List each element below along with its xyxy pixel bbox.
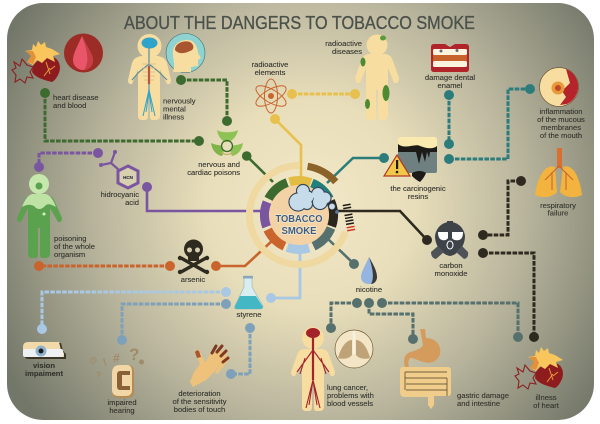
connector: orange arsenic xyxy=(34,240,273,271)
icon: gas mask xyxy=(431,221,468,259)
center label: TOBACCO xyxy=(276,213,322,225)
label: carbon monoxide: monoxide xyxy=(435,269,467,278)
label: nervously mental illness: nervously xyxy=(163,96,196,106)
label: inflammation of the mucous membranes: inflammation xyxy=(539,107,583,116)
icon: hand xyxy=(190,346,228,387)
connector: muted blue styrene xyxy=(117,299,255,379)
icon: ear with symbols: @ xyxy=(89,356,97,365)
label: respiratory failure: failure xyxy=(548,208,568,218)
connector: teal resins xyxy=(327,84,535,183)
icon: ear with symbols: ! xyxy=(101,357,109,369)
label: lung cancer: lung cancer, xyxy=(327,383,368,392)
central tobacco smoke diagram xyxy=(236,152,362,278)
label: deterioration of sensitivity: deterioration xyxy=(178,389,221,398)
label: poisoning of the whole organism: of the whole xyxy=(54,242,95,251)
label: poisoning of the whole organism: organism xyxy=(54,250,85,259)
icon: circulatory figure xyxy=(291,327,335,411)
label: deterioration of sensitivity: of the sensitivity xyxy=(172,397,227,406)
icon: eye xyxy=(23,342,66,359)
icon: warning triangle xyxy=(384,155,426,182)
icon: heart with burst xyxy=(12,41,60,83)
label: inflammation of the mucous membranes: of the mouth xyxy=(540,131,582,140)
icon: heart with burst lower xyxy=(515,347,563,389)
label: arsenic: arsenic xyxy=(181,275,205,284)
label: inflammation of the mucous membranes: membranes xyxy=(541,123,581,132)
icon: lungs xyxy=(535,148,582,197)
label: hidrocyanic acid: acid xyxy=(125,198,139,207)
connector: green poisons xyxy=(40,75,273,182)
icon: nervous system figure xyxy=(128,34,171,120)
label: illness of heart: illness xyxy=(535,393,557,402)
label: radioactive elements: radioactive xyxy=(252,60,288,69)
label: poisoning of the whole organism: poisoning xyxy=(54,234,87,243)
label: heart disease: heart disease xyxy=(53,93,99,102)
label: the carcinogenic resins: resins xyxy=(408,192,428,201)
label: nervous and cardiac poisons: nervous and xyxy=(198,160,240,169)
icon: stomach and intestine xyxy=(400,329,451,409)
label: inflammation of the mucous membranes: of the mucous xyxy=(537,115,585,124)
label: radioactive diseases: radioactive xyxy=(325,39,362,48)
label: carbon monoxide: carbon xyxy=(439,261,463,270)
label: nicotine: nicotine xyxy=(356,285,382,294)
smoke cloud xyxy=(289,184,339,214)
label: illness of heart: of heart xyxy=(533,401,560,410)
connector: yellow radioactive xyxy=(270,89,360,178)
label: respiratory failure: respiratory xyxy=(540,201,576,210)
label: heart disease: and blood xyxy=(53,101,86,110)
icon: lungs circle xyxy=(335,330,373,368)
icon: resin box xyxy=(398,137,437,173)
label: radioactive elements: elements xyxy=(255,68,286,77)
icon: HCN molecule xyxy=(99,150,138,188)
icon: ear with symbols: ? xyxy=(96,370,102,380)
label: damage dental enamel: damage dental xyxy=(425,73,475,82)
cigarette stripes xyxy=(343,204,355,231)
label: gastric damage and intestine: gastric damage xyxy=(457,391,509,400)
label: impaired hearing: impaired xyxy=(107,398,137,407)
label: styrene: styrene xyxy=(237,310,261,319)
label: vision impaiment: impaiment xyxy=(25,369,63,378)
icon: ear with symbols xyxy=(89,345,144,398)
label: lung cancer: problems with xyxy=(327,391,374,400)
icon: ear with symbols: ? xyxy=(129,345,139,364)
icon: poisoned green figure xyxy=(17,174,62,258)
label: nervous and cardiac poisons: cardiac poisons xyxy=(187,168,240,177)
label: nervously mental illness: mental xyxy=(163,104,186,114)
label: deterioration of sensitivity: bodies of touch xyxy=(174,405,225,414)
center label: SMOKE xyxy=(282,225,316,237)
center label xyxy=(276,213,322,237)
icon: blood drop circle xyxy=(64,34,103,72)
label: the carcinogenic resins: the carcinogenic xyxy=(390,184,446,193)
label: vision impaiment: vision xyxy=(33,361,55,370)
label: damage dental enamel: enamel xyxy=(438,81,463,90)
icon: inflamed mouth circle xyxy=(540,68,578,106)
icon: ear with symbols: # xyxy=(113,351,120,365)
label: radioactive diseases: diseases xyxy=(332,47,362,56)
label: impaired hearing: hearing xyxy=(109,406,135,415)
icon: radioactive diseases figure xyxy=(355,34,399,120)
title: ABOUT THE DANGERS TO TOBACCO SMOKE xyxy=(124,13,475,33)
label: lung cancer: blood vessels xyxy=(327,399,373,408)
icon: biohazard xyxy=(211,130,243,156)
label: nervously mental illness: illness xyxy=(163,112,184,122)
icon: HCN molecule: HCN xyxy=(123,175,133,180)
icon: atom xyxy=(253,79,289,113)
label: gastric damage and intestine: and intestine xyxy=(457,399,500,408)
connector: slate nicotine xyxy=(326,239,523,344)
connector: purple hydrocyanic acid xyxy=(34,148,264,211)
connector: black carbon monoxide xyxy=(335,176,539,342)
icon: flask xyxy=(235,276,263,309)
icon: nicotine drop xyxy=(361,257,377,284)
icon: teeth xyxy=(431,44,469,72)
icon: head with brain xyxy=(166,34,205,72)
icon: skull and crossbones xyxy=(178,240,209,274)
label: hidrocyanic acid: hidrocyanic xyxy=(101,190,139,199)
connector: light blue styrene xyxy=(37,250,300,334)
